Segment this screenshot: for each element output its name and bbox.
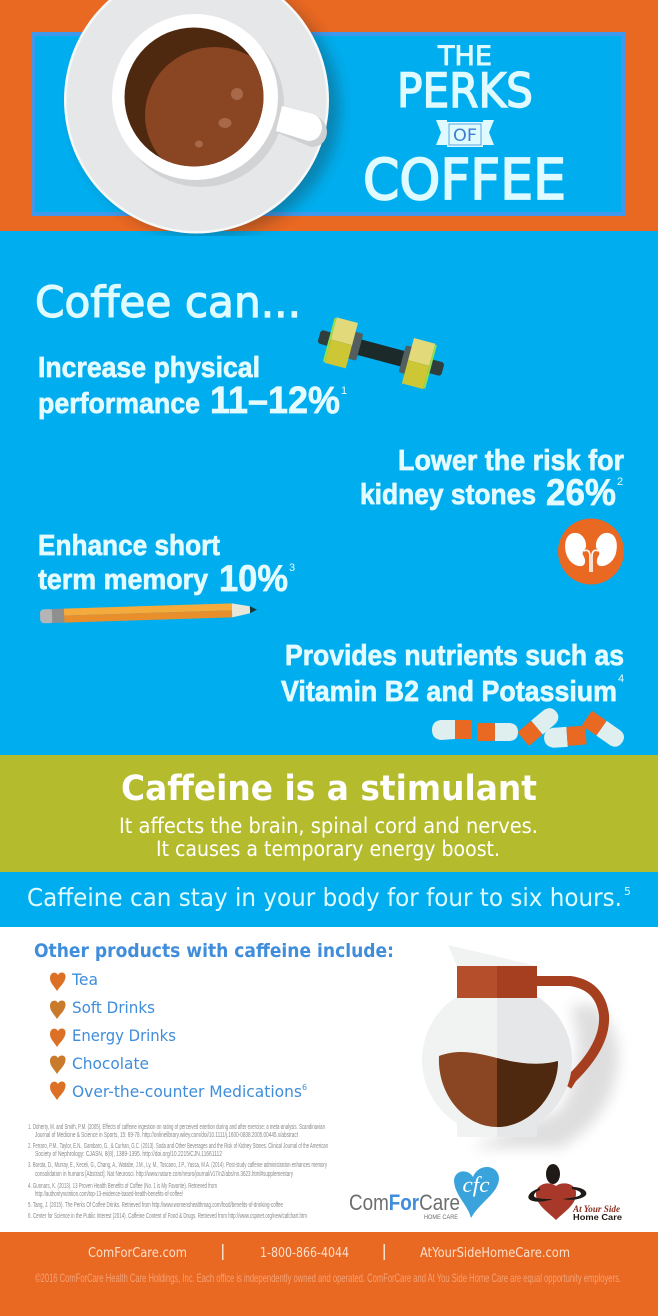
heading: other products: Other products with caffeine include:	[34, 940, 394, 962]
panel: caffeine is a stimulant: Caffeine is a stimulant	[121, 769, 537, 809]
panel: title box	[33, 34, 623, 214]
text: kidney stones: kidney stones	[360, 479, 536, 511]
list item: medications: 6	[302, 1083, 307, 1092]
panel: caffeine is a stimulant: It affects the brain, spinal cord and nerves.	[119, 814, 538, 838]
list item: soft drinks	[50, 998, 155, 1019]
text: kidney stones	[360, 445, 624, 513]
text: physical performance: performance	[38, 388, 200, 420]
logo: comforcare	[349, 1167, 499, 1221]
list item: tea: Tea	[71, 970, 98, 989]
text: physical performance	[38, 352, 347, 422]
blue main background	[0, 231, 658, 755]
list item: chocolate: Chocolate	[72, 1054, 149, 1073]
icon: coffee pitcher	[422, 945, 618, 1148]
references: http://authoritynutrition.com/top-13-evidence-based-health-benefits-of-coffee/	[35, 1191, 183, 1198]
references: consolidation in humans [Abstract]. Nat Neurosci. http://www.nature.com/neuro/journal/v17/n2/abs/nn.3623.html#supplementary	[35, 1171, 293, 1178]
references: 1. Doherty, M. and Smith, P.M. (2005). Effects of caffeine ingestion on rating of perceived exertion during and after exercise: a meta-analysis. Scandinavian	[28, 1124, 325, 1131]
references	[28, 1124, 328, 1220]
text: physical performance: 11–12%	[210, 380, 340, 422]
logo: at your side home care: At Your Side	[572, 1204, 620, 1214]
text: nutrients: Vitamin B2 and Potassium	[281, 676, 617, 708]
logo: comforcare: HOME CARE	[424, 1214, 459, 1221]
list: products with caffeine	[50, 970, 307, 1101]
text: short term memory	[38, 530, 295, 599]
text: nutrients: Provides nutrients such as	[285, 640, 624, 672]
text: kidney stones: Lower the risk for	[398, 445, 624, 477]
logo: comforcare: cfc	[462, 1172, 490, 1197]
icon: pills	[432, 705, 627, 750]
text: physical performance: 1	[341, 385, 347, 397]
text: kidney stones: 26%	[546, 472, 616, 513]
references: Journal of Medicine & Science in Sports, 15: 69-78. http://onlinelibrary.wiley.com/doi/10.1111/j.1600-0838.2005.00445.x/abstract	[35, 1132, 298, 1139]
white lower section	[0, 927, 658, 1232]
icon: coffee cup on saucer	[64, 0, 340, 238]
references: 4. Gunnars, K. (2013). 13 Proven Health Benefits of Coffee (No. 1 is My Favorite). Retrieved from	[28, 1183, 217, 1190]
ribbon: of: OF	[453, 126, 477, 146]
panel: footer	[0, 1232, 658, 1316]
text: short term memory: term memory	[38, 564, 208, 596]
panel: footer: AtYourSideHomeCare.com	[420, 1246, 570, 1261]
references: 6. Center for Science in the Public Interest (2014). Caffeine Content of Food & Drugs. Retrieved from http://www.cspinet.org/new/cafchart.htm	[28, 1213, 307, 1220]
text: short term memory: Enhance short	[38, 530, 220, 562]
icon: kidneys	[558, 518, 624, 584]
title: The Perks of Coffee: PERKS	[397, 64, 533, 119]
text: short term memory: 10%	[219, 558, 288, 599]
text: nutrients	[281, 640, 624, 708]
orange header background	[0, 0, 658, 231]
panel: caffeine duration	[0, 872, 658, 927]
title: The Perks of Coffee: THE	[437, 41, 492, 72]
logo: comforcare: ComForCare	[349, 1190, 460, 1215]
references: 2. Ferraro, P.M., Taylor, E.N., Gambaro, G., & Curhan, G.C. (2013). Soda and Other Beverages and the Risk of Kidney Stones. Clinical Journal of the American	[28, 1143, 328, 1150]
references: 3. Borota, D., Murray, E., Keceli, G., Chang, A., Watabe, J.M., Ly, M., Toscano, J.P., Yassa, M.A. (2014). Post-study caffeine administration enhances memory	[28, 1162, 327, 1169]
icon: pencil	[40, 603, 257, 623]
icon: dumbbell	[313, 314, 449, 393]
panel: caffeine duration: Caffeine can stay in your body for four to six hours.	[27, 883, 622, 912]
references: 5. Tang, J. (2015). The Perks Of Coffee Drinks. Retrieved from http://www.womenshealthmag.com/food/benefits-of-drinking-coffee	[28, 1202, 283, 1209]
ribbon: of	[436, 120, 494, 147]
logo: at your side home care: Home Care	[573, 1212, 622, 1222]
title: The Perks of Coffee	[363, 41, 566, 213]
list item: energy drinks: Energy Drinks	[72, 1026, 176, 1045]
panel: caffeine duration: 5	[624, 885, 631, 898]
text: kidney stones: 2	[617, 476, 623, 488]
text: nutrients: 4	[618, 673, 624, 685]
list item: soft drinks: Soft Drinks	[72, 998, 155, 1017]
panel: caffeine is a stimulant: It causes a temporary energy boost.	[156, 837, 500, 861]
text: physical performance: Increase physical	[38, 352, 260, 384]
list item: medications: Over-the-counter Medications	[72, 1082, 302, 1101]
panel: caffeine is a stimulant	[0, 755, 658, 872]
panel: footer: ComForCare.com	[88, 1246, 187, 1261]
text: short term memory: 3	[289, 562, 295, 574]
title: The Perks of Coffee: COFFEE	[363, 148, 566, 213]
logo: at your side home care	[528, 1164, 622, 1222]
panel: footer: 1-800-866-4044	[260, 1246, 349, 1261]
heading: coffee can: Coffee can...	[35, 278, 301, 328]
references: Society of Nephrology: CJASN, 8(8), 1389-1395. http://doi.org/10.2215/CJN.11661112	[35, 1151, 222, 1158]
list item: tea	[50, 970, 98, 991]
